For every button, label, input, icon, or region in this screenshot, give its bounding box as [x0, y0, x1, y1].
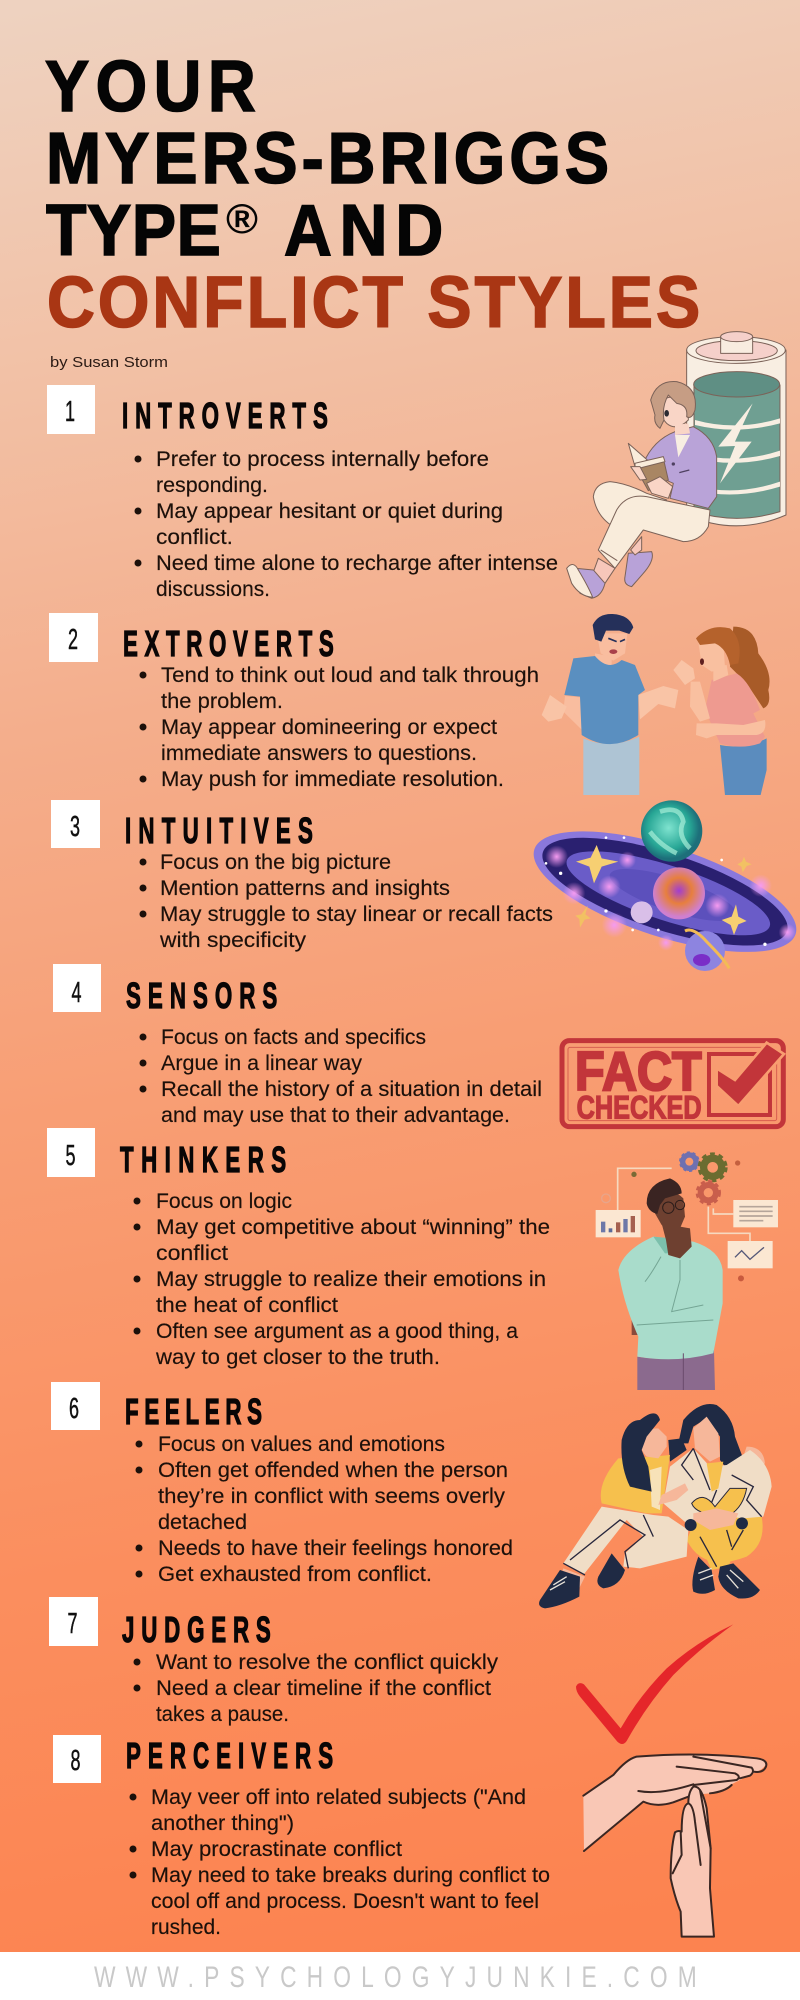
bullet list: thinkers: way to get closer to the truth.	[155, 1345, 440, 1369]
illustration: fact checked stamp: CHECKED	[577, 1088, 702, 1125]
bullet list: perceivers: rushed.	[151, 1915, 221, 1939]
illustration: two people arguing	[542, 614, 770, 795]
panel: feelers	[51, 1382, 772, 1608]
illustration: two friends sitting together	[539, 1404, 772, 1608]
title: ®	[226, 195, 258, 242]
illustration: fact checked stamp	[562, 1041, 784, 1127]
number badge 6	[51, 1382, 100, 1430]
bullet list: thinkers: Focus on logic	[156, 1189, 292, 1213]
bullet list: introverts: conflict.	[156, 525, 233, 549]
bullet list: perceivers: another thing")	[151, 1811, 294, 1835]
bullet list: perceivers: May need to take breaks during conflict to	[151, 1863, 550, 1887]
bullet list: feelers	[136, 1432, 513, 1586]
bullet list: feelers: Needs to have their feelings honored	[158, 1536, 513, 1560]
bullet list: perceivers: May veer off into related subjects ("And	[151, 1785, 526, 1809]
bullet list: sensors: Recall the history of a situation in detail	[161, 1077, 542, 1101]
number badge 2: 2	[68, 624, 78, 656]
heading: extroverts: EXTROVERTS	[123, 625, 334, 664]
bullet list: introverts: May appear hesitant or quiet during	[156, 499, 503, 523]
heading: perceivers: PERCEIVERS	[126, 1737, 333, 1776]
bullet list: thinkers	[134, 1189, 550, 1369]
bullet list: feelers: detached	[158, 1510, 247, 1534]
bullet list: introverts: discussions.	[156, 577, 270, 601]
byline: by Susan Storm	[50, 354, 168, 371]
illustration: man thinking with charts and gears	[596, 1153, 778, 1390]
bullet list: sensors: and may use that to their advantage.	[161, 1103, 510, 1127]
title: MYERS-BRIGGS	[46, 117, 609, 199]
bullet list: introverts: responding.	[156, 473, 268, 497]
number badge 3	[51, 800, 100, 848]
bullet list: intuitives: Focus on the big picture	[160, 850, 391, 874]
number badge 3: 3	[70, 811, 80, 843]
number badge 5: 5	[65, 1140, 76, 1172]
bullet list: introverts	[134, 447, 558, 601]
bullet list: extroverts: immediate answers to questions.	[161, 741, 477, 765]
heading: feelers: FEELERS	[125, 1393, 262, 1432]
bullet list: thinkers: conflict	[156, 1241, 228, 1265]
number badge 4: 4	[71, 977, 82, 1009]
bullet list: extroverts: the problem.	[161, 689, 283, 713]
number badge 8: 8	[70, 1745, 81, 1777]
panel: extroverts	[49, 613, 770, 795]
heading: judgers: JUDGERS	[122, 1611, 271, 1650]
bullet list: feelers: Often get offended when the person	[158, 1458, 508, 1482]
panel: intuitives	[51, 800, 800, 977]
bullet list: feelers: they’re in conflict with seems overly	[158, 1484, 505, 1508]
panel: introverts	[47, 332, 786, 601]
bullet list: perceivers	[130, 1785, 550, 1939]
number badge 7	[49, 1597, 98, 1646]
title: CONFLICT STYLES	[47, 261, 700, 343]
title: YOUR	[45, 45, 256, 127]
bullet list: introverts: Need time alone to recharge after intense	[156, 551, 558, 575]
illustration: fact checked stamp: FACT	[575, 1041, 702, 1102]
heading: intuitives: INTUITIVES	[125, 812, 313, 851]
bullet list: intuitives: May struggle to stay linear or recall facts	[160, 902, 553, 926]
panel: perceivers	[53, 1735, 766, 1939]
bullet list: feelers: Get exhausted from conflict.	[158, 1562, 432, 1586]
bullet list: thinkers: May get competitive about “winning” the	[156, 1215, 550, 1239]
number badge 6: 6	[69, 1393, 79, 1425]
number badge 4	[53, 964, 101, 1012]
title: AND	[284, 189, 443, 271]
bullet list: perceivers: cool off and process. Doesn't want to feel	[151, 1889, 539, 1913]
panel: thinkers	[47, 1128, 778, 1390]
icon: red check mark	[576, 1624, 733, 1744]
bullet list: sensors: Argue in a linear way	[161, 1051, 362, 1075]
bullet list: extroverts	[140, 663, 539, 791]
bullet list: intuitives	[140, 850, 553, 952]
heading: thinkers: THINKERS	[120, 1141, 286, 1180]
number badge 7: 7	[67, 1608, 78, 1640]
title	[45, 45, 700, 343]
footer website address: WWW.PSYCHOLOGYJUNKIE.COM	[94, 1960, 697, 1994]
illustration: galaxy and planets	[520, 800, 800, 977]
illustration: hands making time-out sign	[583, 1754, 766, 1937]
bullet list: extroverts: May push for immediate resolution.	[161, 767, 504, 791]
heading: sensors: SENSORS	[126, 977, 277, 1016]
panel: sensors	[53, 964, 784, 1127]
bullet list: feelers: Focus on values and emotions	[158, 1432, 445, 1456]
bullet list: judgers: Need a clear timeline if the conflict	[156, 1676, 491, 1700]
bullet list: extroverts: Tend to think out loud and talk through	[161, 663, 539, 687]
illustration: woman reading against battery	[567, 332, 786, 598]
number badge 1: 1	[65, 396, 75, 428]
bullet list: perceivers: May procrastinate conflict	[151, 1837, 402, 1861]
footer band	[0, 1952, 800, 2000]
bullet list: intuitives: Mention patterns and insights	[160, 876, 450, 900]
number badge 8	[53, 1735, 101, 1783]
panel: judgers	[49, 1597, 733, 1744]
bullet list: extroverts: May appear domineering or expect	[161, 715, 497, 739]
bullet list: judgers: Want to resolve the conflict quickly	[156, 1650, 498, 1674]
title: TYPE	[46, 189, 221, 271]
number badge 5	[47, 1128, 95, 1177]
bullet list: judgers	[134, 1650, 498, 1726]
bullet list: introverts: Prefer to process internally before	[156, 447, 489, 471]
bullet list: thinkers: Often see argument as a good thing, a	[156, 1319, 518, 1343]
bullet list: judgers: takes a pause.	[156, 1702, 289, 1726]
bullet list: thinkers: the heat of conflict	[156, 1293, 338, 1317]
heading: introverts: INTROVERTS	[122, 397, 328, 436]
number badge 1	[47, 385, 95, 434]
bullet list: intuitives: with specificity	[159, 928, 306, 952]
bullet list: sensors: Focus on facts and specifics	[161, 1025, 426, 1049]
bullet list: thinkers: May struggle to realize their emotions in	[156, 1267, 546, 1291]
number badge 2	[49, 613, 98, 662]
bullet list: sensors	[140, 1025, 542, 1127]
